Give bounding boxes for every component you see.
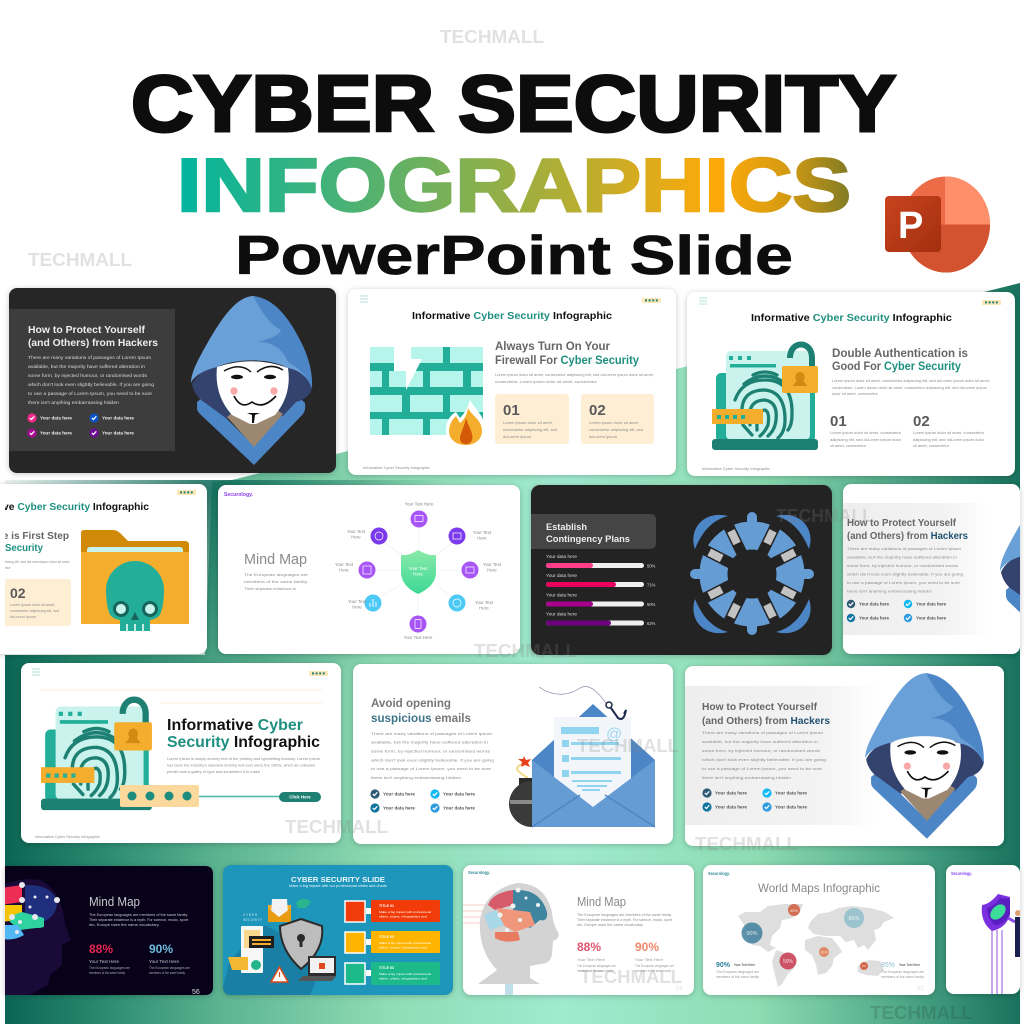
cropped text — [0, 501, 149, 626]
stat 90%: 90% — [149, 942, 173, 956]
card 02: Lorem ipsum dolor sit amet, — [589, 420, 639, 425]
slide 7: how to protect (light, cropped): to use a passage of Lorem Ipsum, you need to be sure — [847, 580, 961, 585]
slide 10: how to protect (light): there isn't anything embarrassing hidden — [702, 775, 791, 780]
text panel: Your data here — [40, 430, 73, 436]
icon: hooded hacker — [865, 673, 984, 839]
stat 90% — [635, 940, 674, 973]
world map with bubbles: 5% — [862, 964, 867, 968]
slide 5: mind map shield: members of the same family. — [244, 579, 308, 584]
mind map diagram: Here — [479, 606, 489, 610]
slide 9: suspicious emails: There are many variations of passages of Lorem Ipsum — [371, 731, 493, 736]
row 03: TITLE 03 — [379, 966, 394, 970]
column 01 — [830, 413, 902, 448]
slide 9: suspicious emails: available, but the majority have suffered alteration in — [371, 740, 488, 744]
world map with bubbles: 45% — [790, 908, 798, 913]
slide 7: how to protect (light, cropped): Your data here — [859, 616, 890, 620]
slide 10: how to protect (light): some form, by injected humour, or randomised words — [702, 748, 820, 753]
text panel: which don't look even slightly believable. If you are going — [28, 382, 155, 387]
progress bars — [546, 554, 656, 626]
world map with bubbles: 90% — [746, 931, 758, 937]
progress bars: 62% — [647, 621, 656, 626]
title line 1: CYBER SECURITY — [131, 59, 896, 148]
icon: PowerPoint logo: P — [898, 205, 923, 247]
progress bars: Your data here — [546, 554, 578, 559]
stat 88% — [577, 940, 616, 973]
heading — [847, 518, 968, 542]
slide 9: suspicious emails: Your data here — [443, 792, 476, 796]
slide 10: how to protect (light): which don't look even slightly believable. If you are going — [702, 757, 826, 762]
slide 10: how to protect (light): Your data here — [775, 804, 808, 810]
card 01: 01 — [503, 402, 520, 419]
heading and text: Mind Map — [577, 894, 626, 909]
heading panel — [531, 514, 656, 549]
security illustration: CYBER — [243, 913, 258, 917]
slide 13: mind map (light): 56 — [676, 986, 683, 992]
heading: World Maps Infographic — [758, 881, 880, 895]
slide 3: double authentication — [687, 292, 1015, 476]
slide 7: how to protect (light, cropped): there isn't anything embarrassing hidden — [847, 588, 932, 594]
column 02: Lorem ipsum dolor sit amet, consectetur — [913, 430, 985, 435]
stat 90%: Your Text Here — [734, 963, 755, 967]
stat 88%: The European languages are — [89, 966, 130, 970]
column 02: adipiscing elit, sed doLorem ipsum dolor — [913, 437, 985, 442]
card 01: doLorem ipsum — [503, 434, 532, 439]
row 02 — [345, 931, 440, 953]
heading: CYBER SECURITY SLIDE — [291, 875, 385, 884]
heading: (and Others) from Hackers — [847, 531, 968, 542]
column 01: sit amet, consectetur — [830, 443, 867, 448]
slide 7: how to protect (light, cropped) — [843, 484, 1024, 654]
security illustration: SECURITY — [243, 918, 263, 922]
heading: Security Infographic — [167, 734, 320, 751]
row 02: Make a big impact with professional — [379, 941, 431, 945]
slide 7: how to protect (light, cropped): available, but the majority have suffered alteration in — [847, 554, 957, 560]
heading — [167, 717, 320, 751]
slide 4: folder with skull — [0, 484, 207, 654]
slide 7: how to protect (light, cropped): Your data here — [859, 602, 890, 606]
watermark: slide 13: TECHMALL — [580, 967, 682, 987]
subheading — [832, 348, 968, 373]
watermark: slide 10: TECHMALL — [695, 834, 798, 854]
slide 1: how to protect (dark) — [9, 288, 336, 473]
slide 14: world map: Securology. — [708, 871, 730, 876]
icon: lifebuoy — [690, 512, 814, 635]
heading and text: Their separate existence is a myth. For science, music, sport — [89, 918, 189, 922]
progress bars: Your data here — [546, 592, 578, 598]
card 01: Lorem ipsum dolor sit amet, — [503, 420, 553, 425]
slide 2: firewall — [348, 289, 676, 475]
row 02: TITLE 02 — [379, 935, 394, 939]
slide 5: mind map shield — [218, 485, 520, 654]
heading: How to Protect Yourself — [702, 701, 817, 713]
progress bars: 50% — [647, 564, 656, 568]
stat 90%: members of the same family — [635, 969, 671, 973]
slide 8: fingerprint hero: printer took a galley of type and scrambled it to make — [167, 769, 261, 774]
mind map diagram: Your Text Here — [405, 502, 434, 506]
heading — [702, 701, 830, 727]
stat 90%: Your Text Here — [635, 957, 664, 962]
stat 90% — [149, 942, 190, 975]
title line 2 gradient: INFOGRAPHICS — [177, 143, 851, 227]
heading: Informative Cyber Security Infographic — [751, 312, 952, 324]
icon: head with colored brain — [0, 879, 71, 995]
row 02: slides, charts, infographics and — [379, 946, 427, 950]
watermark: slide 8: TECHMALL — [285, 817, 388, 837]
slide 11: mind map (dark) — [0, 866, 213, 996]
row 01: Make a big impact with professional — [379, 910, 431, 914]
mind map diagram: Here — [477, 536, 487, 540]
stat 88%: 88% — [89, 942, 113, 956]
title line 3: PowerPoint Slide — [235, 224, 793, 286]
slide 15: shield (cropped) — [946, 865, 1021, 994]
progress bars: 50% — [647, 602, 656, 607]
slide 2: firewall: Lorem ipsum dolor sit amet, consectetur adipiscing elit, sed doLorem ipsum dolor sit amet, — [495, 372, 654, 377]
green diagonal backdrop — [5, 283, 1020, 1024]
column 02 — [913, 413, 985, 448]
subheading: Always Turn On Your — [495, 341, 611, 353]
slide 6: contingency plans (dark) — [531, 485, 832, 655]
heading and text: The European languages are members of the same family. — [577, 913, 672, 917]
stat 90%: 90% — [716, 962, 731, 969]
slide 8: fingerprint hero: Lorem Ipsum is simply dummy text of the printing and typesetting industry. Lorem Ipsum — [167, 756, 321, 761]
icon: head with colored brain — [463, 883, 559, 995]
subheading: Double Authentication is — [832, 348, 968, 360]
slide 5: mind map shield: The European languages are — [244, 572, 309, 577]
slide 5: mind map shield: Their separate existence is — [244, 586, 296, 591]
row 01 — [345, 900, 440, 922]
icon: skull folder — [81, 530, 189, 631]
card 02: doLorem ipsum — [589, 434, 618, 439]
mind map diagram: Your Text — [475, 600, 494, 605]
progress bars: Your data here — [546, 612, 578, 616]
text panel: Your data here — [102, 416, 135, 420]
heading and text — [89, 894, 189, 927]
icon: fingerprint laptop with padlock — [712, 344, 818, 450]
watermark: slide 5 corner: TECHMALL — [474, 641, 577, 661]
slide 9: suspicious emails: Your data here — [443, 806, 476, 810]
stat 88%: 88% — [577, 940, 601, 954]
slide 9: suspicious emails: some form, by injected humour, or randomised words — [371, 748, 490, 754]
stat 85%: The European languages are — [881, 970, 924, 974]
progress bars: 71% — [647, 582, 656, 588]
heading and text: Their separate existence is a myth. For science, music, sport — [577, 918, 672, 922]
slide 7: how to protect (light, cropped): which don't look even slightly believable. If you are going — [847, 572, 963, 576]
icon: fingerprint laptop — [41, 700, 152, 810]
watermark: slide 6: TECHMALL — [776, 506, 873, 526]
slide 8: fingerprint hero: has been the industry's standard dummy text ever since the 1500s, when an unknown — [167, 762, 315, 768]
stat 90%: The European languages are — [635, 964, 674, 968]
stat 90%: The European languages are — [149, 966, 190, 970]
slide 8: fingerprint hero — [21, 663, 341, 843]
heading and text: Mind Map — [89, 894, 140, 909]
slide 10: how to protect (light): Your data here — [775, 790, 808, 796]
slide 10: how to protect (light): available, but the majority have suffered alteration in — [702, 739, 818, 744]
slide 14: world map — [703, 865, 935, 995]
heading — [289, 875, 387, 888]
stat 85% — [881, 962, 924, 979]
subheading: Good For Cyber Security — [832, 361, 962, 373]
stat 90%: Your Text Here — [149, 959, 179, 964]
slide 9: suspicious emails — [353, 664, 673, 844]
progress bars: Your data here — [546, 573, 578, 578]
text panel: There are many variations of passages of Lorem Ipsum — [28, 355, 151, 360]
slide 14: world map: 62 — [917, 986, 924, 992]
slide 2: firewall: Informative Cyber Security Infographic — [363, 465, 430, 470]
slide 10: how to protect (light): to use a passage of Lorem Ipsum, you need to be sure — [702, 766, 823, 771]
icon: PowerPoint logo — [885, 176, 990, 272]
slide 2: firewall: consectetur. Lorem ipsum dolor sit amet, consectetur — [495, 379, 598, 384]
slide 10: how to protect (light): Your data here — [715, 804, 748, 810]
heading and text — [577, 894, 672, 927]
heading: Make a big impact with our professional slides and charts — [289, 884, 387, 888]
stat 85%: members of the same family — [881, 975, 924, 979]
stat 90%: members of the same family — [716, 975, 759, 979]
slide 15: shield (cropped): Securology. — [951, 871, 972, 876]
watermark: bottom right: TECHMALL — [870, 1003, 973, 1023]
card 01: consectetur adipiscing elit, sed — [503, 427, 557, 432]
slide 9: suspicious emails: there isn't anything embarrassing hidden — [371, 775, 461, 780]
text panel — [9, 309, 175, 451]
mind map diagram: Your Text Here — [404, 635, 433, 640]
button — [279, 792, 321, 802]
subheading: Firewall For Cyber Security — [495, 355, 640, 367]
stat 90% — [716, 962, 759, 979]
slide 8: fingerprint hero: Informative Cyber Security Infographic — [35, 834, 100, 839]
slide 9: suspicious emails: Your data here — [383, 792, 416, 796]
world map with bubbles: 50% — [783, 959, 794, 965]
text panel: there isn't anything embarrassing hidden — [28, 400, 120, 405]
world map with bubbles: 85% — [848, 916, 860, 922]
icon: hooded hacker — [191, 296, 312, 465]
text panel: Your data here — [102, 430, 135, 436]
card 01 — [495, 394, 569, 444]
security illustration — [228, 899, 336, 982]
heading panel: Establish — [546, 522, 587, 533]
button: Click Here — [289, 794, 311, 800]
icon: purple shield with person — [982, 894, 1021, 994]
column 01: 01 — [830, 413, 847, 430]
row 03 — [345, 962, 440, 985]
shield: Here — [413, 572, 423, 576]
column 02: sit amet, consectetur — [913, 443, 950, 448]
cropped text: 02 — [10, 585, 26, 601]
mind map diagram: Here — [352, 604, 362, 610]
cropped text: Lorem ipsum dolor sit amet, — [10, 602, 55, 607]
slide 7: how to protect (light, cropped): some form, by injected humour, or randomised words — [847, 563, 958, 568]
slide 5: mind map shield: Securology. — [224, 492, 254, 498]
text panel: some form, by injected humour, or randomised words — [28, 373, 148, 378]
slide 7: how to protect (light, cropped): There are many variations of passages of Lorem Ipsum — [847, 546, 962, 551]
slide 10: how to protect (light) — [685, 666, 1004, 846]
column 01: adipiscing elit, sed doLorem ipsum dolor — [830, 437, 902, 442]
card 02: consectetur adipiscing elit, sed — [589, 427, 643, 432]
world map with bubbles: 30% — [820, 950, 828, 954]
title — [131, 59, 896, 286]
cropped text: Security — [5, 542, 43, 554]
icon: envelope with letter and hook: @ — [606, 726, 622, 743]
stat 88%: Your Text Here — [577, 957, 606, 962]
slide 13: mind map (light) — [463, 865, 694, 995]
shield: Your Text — [409, 566, 428, 571]
slide 9: suspicious emails: to use a passage of Lorem Ipsum, you need to be sure — [371, 766, 492, 771]
stat 88%: Your Text Here — [89, 959, 119, 964]
slide 3: double authentication: consectetur. Lorem ipsum dolor sit amet, consectetur adipiscing elit, sed doLorem ipsum — [832, 385, 988, 390]
slide 11: mind map (dark): 56 — [192, 989, 200, 996]
text panel: Your data here — [40, 416, 73, 420]
column 01: Lorem ipsum dolor sit amet, consectetur — [830, 430, 902, 435]
heading: How to Protect Yourself — [847, 518, 957, 529]
slide 9: suspicious emails: Your data here — [383, 806, 416, 810]
slide 7: how to protect (light, cropped): Your data here — [916, 602, 947, 606]
text panel: How to Protect Yourself — [28, 324, 145, 336]
mind map diagram: Here — [487, 568, 497, 572]
slide 3: double authentication: Lorem ipsum dolor sit amet, consectetur adipiscing elit, sed doLorem ipsum dolor sit amet, — [832, 378, 990, 383]
stat 88% — [89, 942, 130, 975]
stat 90%: 90% — [635, 940, 659, 954]
slide 7: how to protect (light, cropped): Your data here — [916, 616, 947, 620]
stat 90%: members of the same family — [149, 971, 185, 975]
heading: Informative Cyber — [167, 717, 303, 734]
slide 3: double authentication: dolor sit amet, consectetur — [832, 391, 879, 396]
heading panel: Contingency Plans — [546, 534, 630, 545]
mind map diagram: Here — [339, 568, 349, 572]
mind map diagram: Here — [351, 534, 361, 540]
icon: brick wall with flame — [370, 347, 485, 448]
cropped hacker — [1000, 525, 1020, 612]
cropped text: doLorem ipsum — [10, 614, 37, 619]
heading and text: etc, Europe uses the same vocabulary — [89, 923, 159, 927]
stat 85%: 85% — [881, 962, 895, 969]
icon: bomb — [509, 756, 555, 827]
stat 90%: The European languages are — [716, 970, 759, 974]
mind map diagram: Your Text — [347, 529, 366, 534]
card 02: 02 — [589, 402, 606, 419]
mind map diagram: Your Text — [483, 562, 502, 567]
mind map diagram: Your Text — [473, 530, 492, 535]
mind map diagram — [335, 502, 502, 640]
text panel: to use a passage of Lorem Ipsum, you need to be sure — [28, 391, 153, 396]
watermark: left: TECHMALL — [28, 250, 132, 270]
heading: Informative Cyber Security Infographic — [412, 310, 612, 322]
text panel: available, but the majority have suffered alteration in — [28, 364, 146, 369]
heading: Mind Map — [244, 551, 307, 568]
column 02: 02 — [913, 413, 930, 430]
heading: suspicious emails — [371, 711, 471, 725]
cropped text: consectetur adipiscing elit, sed — [10, 608, 59, 613]
slide 10: how to protect (light): There are many variations of passages of Lorem Ipsum — [702, 730, 824, 735]
subheading — [495, 341, 640, 367]
mind map diagram: Your Text — [348, 599, 367, 604]
mind map diagram: Your Text — [335, 562, 354, 567]
watermark: envelope: TECHMALL — [577, 736, 679, 756]
password box — [120, 785, 199, 807]
icon: envelope with letter and hook — [532, 686, 655, 827]
heading: Avoid opening — [371, 696, 451, 710]
slide 9: suspicious emails: which don't look even slightly believable. If you are going — [371, 758, 494, 762]
row 03: Make a big impact with professional — [379, 972, 431, 976]
heading — [371, 696, 471, 725]
stat 88%: members of the same family — [89, 971, 125, 975]
row 03: slides, charts, infographics and — [379, 976, 427, 980]
heading: (and Others) from Hackers — [702, 715, 830, 727]
heading and text: The European languages are members of the same family. — [89, 913, 188, 917]
heading and text: etc, Europe uses the same vocabulary — [577, 923, 643, 927]
world map with bubbles — [738, 904, 894, 987]
card 02 — [581, 394, 654, 444]
shield — [401, 550, 436, 594]
stat 88%: The European languages are — [577, 964, 616, 968]
stat 88%: members of the same family — [577, 969, 613, 973]
slide 13: mind map (light): Securology. — [468, 870, 490, 875]
text panel: (and Others) from Hackers — [28, 337, 158, 349]
watermark: top: TECHMALL — [440, 27, 544, 47]
slide 3: double authentication: Informative Cyber Security Infographic — [702, 466, 770, 471]
row 01: TITLE 01 — [379, 904, 394, 908]
slide 12: cyber security slide (blue) — [223, 865, 453, 995]
stat 85%: Your Text Here — [899, 963, 920, 967]
slide 10: how to protect (light): Your data here — [715, 790, 748, 796]
row 01: slides, charts, infographics and — [379, 914, 427, 918]
